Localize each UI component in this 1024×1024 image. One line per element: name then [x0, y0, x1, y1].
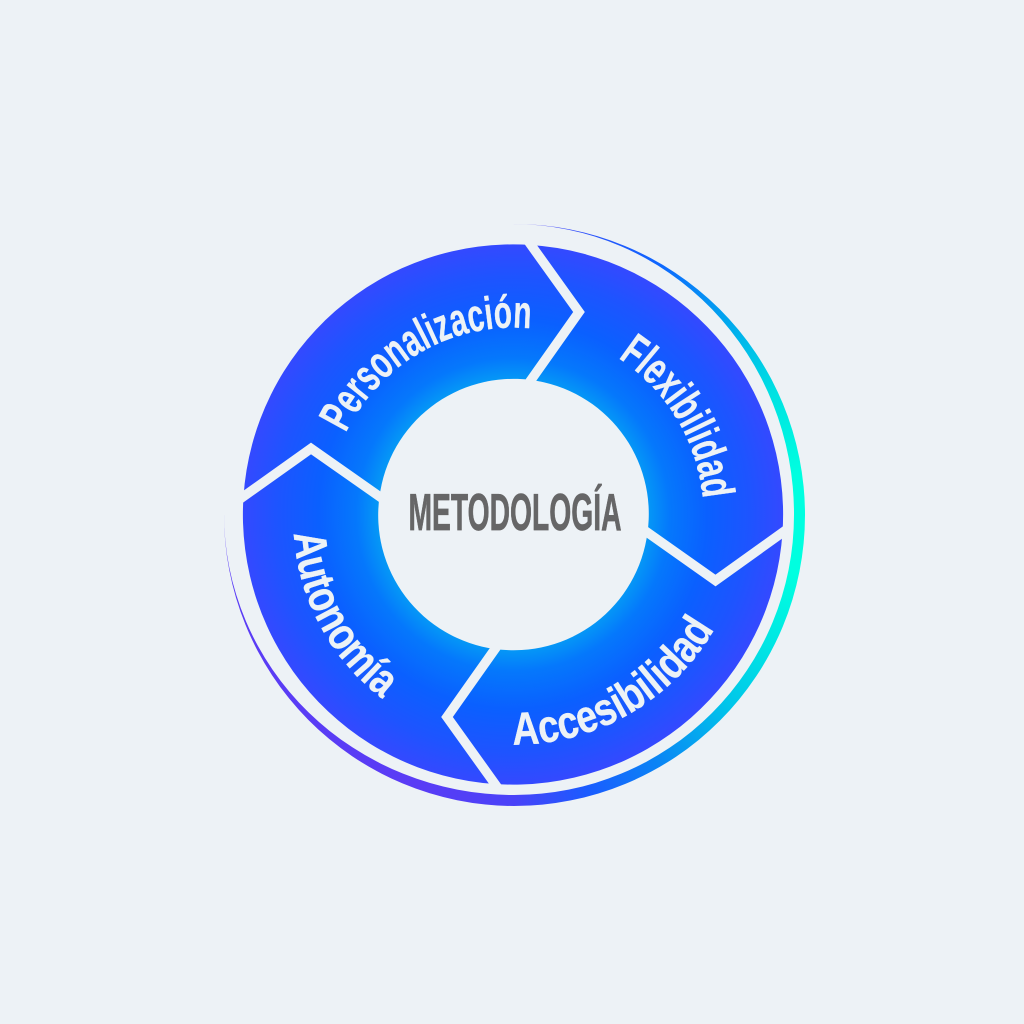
outer gradient crescent ring	[224, 224, 805, 806]
label: Autonomía: Autonomía	[294, 534, 394, 699]
label: Flexibilidad: Flexibilidad	[620, 333, 736, 497]
label: Personalización: Personalización	[318, 294, 530, 432]
segment: Flexibilidad	[531, 245, 783, 580]
segment: Personalización	[244, 244, 579, 496]
segment: Accesibilidad	[447, 532, 782, 785]
label: Accesibilidad: Accesibilidad	[514, 613, 714, 745]
segment: Autonomía	[243, 448, 495, 784]
center title: METODOLOGÍA	[408, 484, 622, 542]
